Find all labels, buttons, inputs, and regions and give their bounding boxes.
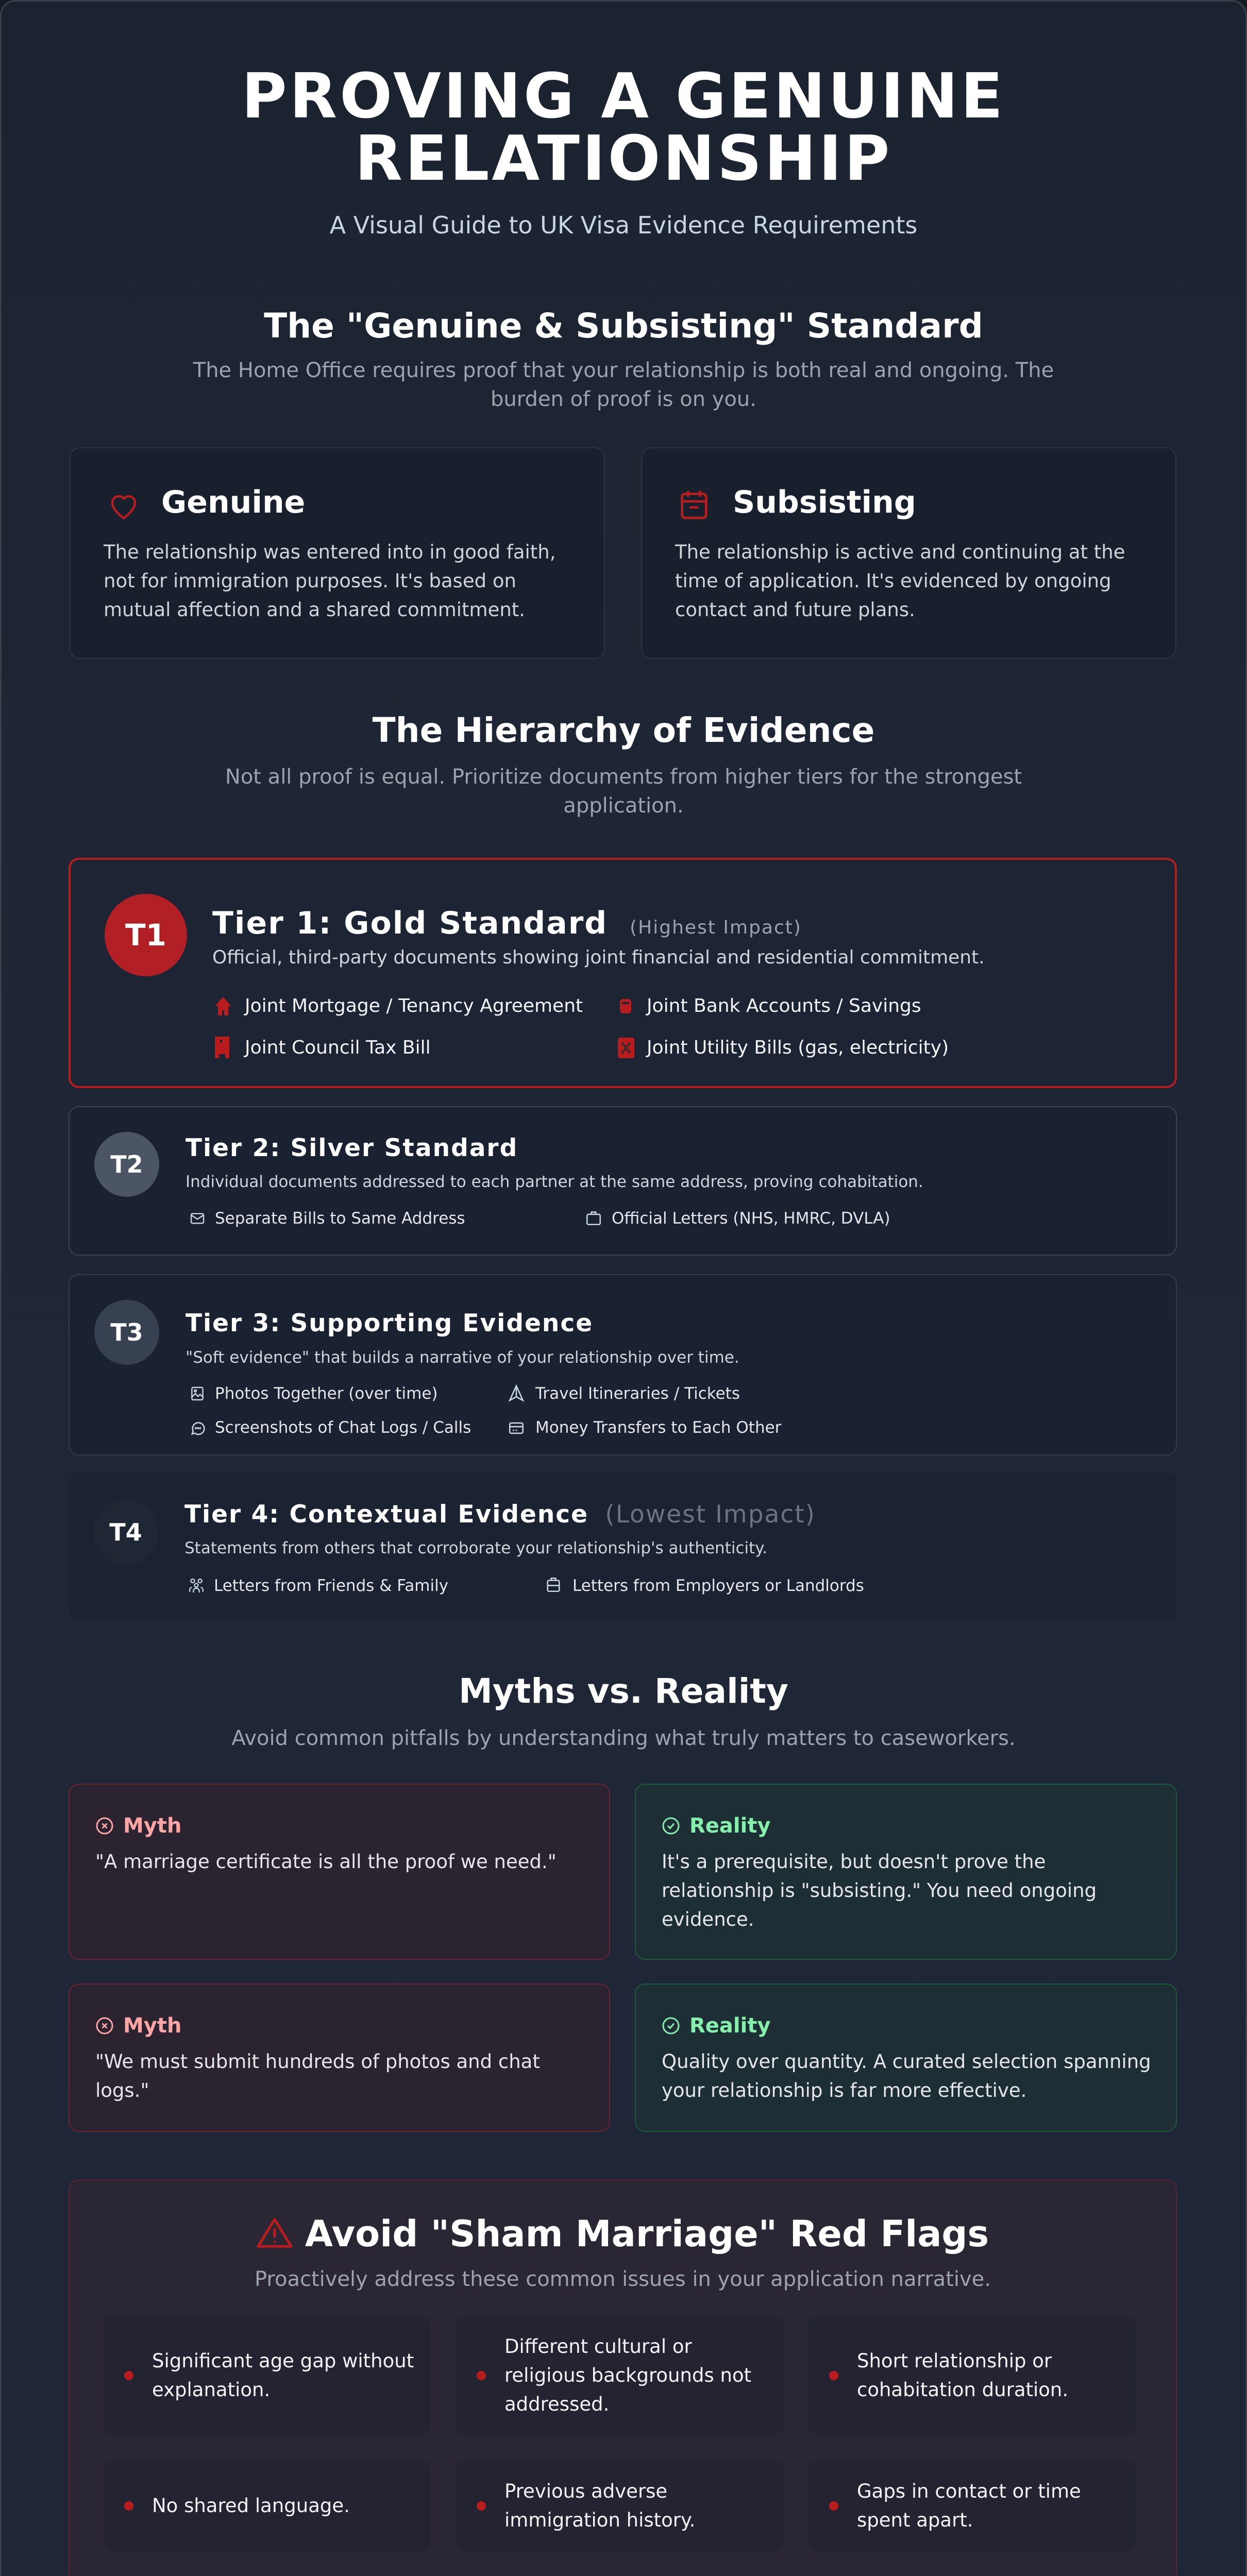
text: myth 2: logs." [95, 2079, 149, 2102]
text: reality 2 [662, 2047, 1151, 2105]
icon: bill [215, 1037, 229, 1058]
panel: myth 1 [69, 1784, 610, 1960]
text: tier 1 description: Official, third-party documents showing joint financial and residential commitment. [212, 947, 985, 968]
panel: tier 1 [69, 858, 1177, 1088]
list: tier 4 items [189, 1577, 864, 1595]
text: hierarchy description: application. [563, 794, 684, 818]
icon: T4 badge: T4 [109, 1518, 142, 1546]
text: tier 4 description: Statements from others that corroborate your relationship's authenticity. [184, 1539, 767, 1557]
flag 3: Short relationship or [857, 2350, 1052, 2372]
panel: tier 4 [69, 1472, 1177, 1620]
text: genuine [103, 541, 556, 621]
text: subsisting: time of application. It's evidenced by ongoing [675, 570, 1111, 592]
text: hierarchy description [225, 765, 1022, 818]
flag 3: cohabitation duration. [857, 2379, 1068, 2401]
list: tier 2 items: Separate Bills to Same Address [215, 1209, 465, 1228]
heading: red flags [70, 2213, 1176, 2255]
flag 1 [104, 2316, 431, 2435]
panel: myth 2 [69, 1984, 610, 2132]
text: reality 1 [662, 1848, 1097, 1934]
icon: calendar [681, 490, 707, 519]
icon: house [215, 997, 231, 1015]
flag 2: Different cultural or [504, 2335, 692, 2358]
heading: myths: Myths vs. Reality [459, 1671, 788, 1711]
text: myth 2: "We must submit hundreds of photos and chat [95, 2050, 540, 2073]
heading: tier 2: Tier 2: Silver Standard [186, 1134, 518, 1162]
icon: travel [508, 1384, 525, 1402]
panel: tier 3 [69, 1274, 1177, 1455]
icon: chat [191, 1422, 205, 1435]
list: tier 3 items: Screenshots of Chat Logs / Calls [215, 1418, 471, 1437]
text: standard description: The Home Office requires proof that your relationship is both real and ongoing. The [193, 359, 1054, 382]
title: RELATIONSHIP [355, 123, 892, 195]
text: reality 1: It's a prerequisite, but doesn't prove the [662, 1851, 1046, 1873]
text: reality 2: Quality over quantity. A curated selection spanning [662, 2050, 1151, 2073]
icon: utility [618, 1038, 634, 1058]
text: myth 2 [95, 2047, 540, 2105]
text: genuine: not for immigration purposes. It's based on [104, 570, 516, 592]
flag 5: immigration history. [504, 2509, 695, 2531]
heading: tier 3: Tier 3: Supporting Evidence [186, 1309, 593, 1337]
text: tier 2 description: Individual documents addressed to each partner at the same address, proving cohabitation. [186, 1173, 923, 1191]
heading: standard: The "Genuine & Subsisting" Standard [264, 306, 983, 346]
list: tier 1 items: Joint Mortgage / Tenancy Agreement [245, 995, 583, 1016]
heading: hierarchy: The Hierarchy of Evidence [373, 710, 874, 750]
label: reality: Reality [689, 2014, 771, 2038]
list: tier 1 items: Joint Bank Accounts / Savings [647, 995, 921, 1016]
label: reality: Reality [689, 1814, 771, 1838]
list: tier 4 items: Letters from Employers or Landlords [572, 1577, 864, 1595]
icon: bank [620, 999, 631, 1013]
text: tier 3 description: "Soft evidence" that builds a narrative of your relationship over time. [186, 1348, 739, 1367]
flag 6: spent apart. [857, 2509, 973, 2531]
icon: check circle [662, 1817, 680, 1835]
list: tier 2 items: Official Letters (NHS, HMRC, DVLA) [612, 1209, 890, 1228]
text: standard description [193, 359, 1054, 411]
icon: T4 badge [93, 1500, 158, 1565]
icon: T2 badge [94, 1132, 159, 1197]
list: tier 1 items [215, 995, 949, 1058]
flag 3 [808, 2316, 1136, 2435]
icon: people [187, 1577, 206, 1594]
list: tier 3 items: Money Transfers to Each Other [535, 1418, 781, 1437]
icon: briefcase [586, 1211, 601, 1225]
text: red flags description: Proactively address these common issues in your application narrative. [255, 2267, 991, 2291]
flag 2 [456, 2316, 783, 2435]
list: red flags [70, 2180, 1176, 2576]
text: reality 1: evidence. [662, 1908, 754, 1930]
heading: subsisting: Subsisting [733, 484, 916, 520]
panel: tier 2 [69, 1106, 1177, 1256]
panel: subsisting [641, 447, 1176, 659]
panel: red flags [69, 2179, 1177, 2576]
panel: reality 1 [635, 1784, 1177, 1960]
text: genuine: The relationship was entered into in good faith, [104, 541, 556, 563]
text: reality 1: relationship is "subsisting." You need ongoing [662, 1879, 1097, 1902]
list: tier 1 items: Joint Council Tax Bill [245, 1037, 431, 1058]
text: genuine: mutual affection and a shared commitment. [104, 599, 525, 621]
text: subsisting [675, 541, 1125, 621]
flag 5 [456, 2461, 783, 2551]
icon: T3 badge: T3 [110, 1318, 143, 1346]
label: myth: Myth [123, 2014, 181, 2038]
flag 5: Previous adverse [504, 2480, 667, 2502]
flag 1: explanation. [152, 2379, 270, 2401]
icon: card [509, 1422, 524, 1434]
icon: envelope [191, 1213, 204, 1224]
icon: case [545, 1575, 562, 1594]
flag 2: addressed. [504, 2393, 609, 2415]
panel: reality 2 [635, 1984, 1177, 2132]
text: subsisting: The relationship is active and continuing at the [675, 541, 1125, 563]
text: reality 2: your relationship is far more effective. [662, 2079, 1026, 2102]
heading: red flags: Avoid "Sham Marriage" Red Flags [305, 2213, 989, 2255]
list: tier 4 items: Letters from Friends & Family [214, 1577, 448, 1595]
list: tier 3 items: Photos Together (over time) [215, 1384, 438, 1403]
icon: heart [111, 495, 136, 519]
flag 6: Gaps in contact or time [857, 2480, 1081, 2502]
text: subsisting: contact and future plans. [675, 599, 915, 621]
text: hierarchy description: Not all proof is equal. Prioritize documents from higher tiers for the strongest [225, 765, 1022, 789]
flag 1: Significant age gap without [152, 2350, 414, 2372]
heading: genuine: Genuine [161, 484, 305, 520]
title [242, 61, 1005, 195]
title: PROVING A GENUINE [242, 61, 1005, 132]
icon: warning [257, 2216, 293, 2249]
icon: check circle [662, 2016, 680, 2035]
flag 6 [808, 2461, 1136, 2551]
text: standard description: burden of proof is on you. [491, 387, 756, 411]
icon: T1 badge [105, 894, 187, 976]
icon: T2 badge: T2 [110, 1150, 143, 1178]
label: myth: Myth [123, 1814, 181, 1838]
flag 4: No shared language. [152, 2495, 350, 2516]
icon: x circle [95, 2016, 114, 2035]
flag 4 [104, 2461, 431, 2551]
panel: genuine [70, 447, 605, 659]
list: tier 2 items [191, 1209, 890, 1228]
list: tier 3 items: Travel Itineraries / Tickets [535, 1384, 740, 1403]
icon: T3 badge [94, 1300, 159, 1365]
icon: photo [191, 1387, 204, 1400]
heading: tier 1: Tier 1: Gold Standard (Highest Impact) [212, 905, 802, 941]
list: tier 3 items [191, 1384, 781, 1437]
flag 2: religious backgrounds not [504, 2364, 751, 2386]
heading: tier 4: Tier 4: Contextual Evidence (Lowest Impact) [184, 1500, 816, 1529]
text: myths description: Avoid common pitfalls by understanding what truly matters to caseworkers. [231, 1726, 1016, 1750]
text: myth 1: "A marriage certificate is all the proof we need." [95, 1851, 557, 1873]
icon: T1 badge: T1 [125, 918, 166, 953]
icon: x circle [95, 1817, 114, 1835]
subtitle: A Visual Guide to UK Visa Evidence Requirements [330, 211, 917, 239]
list: tier 1 items: Joint Utility Bills (gas, electricity) [647, 1037, 949, 1058]
